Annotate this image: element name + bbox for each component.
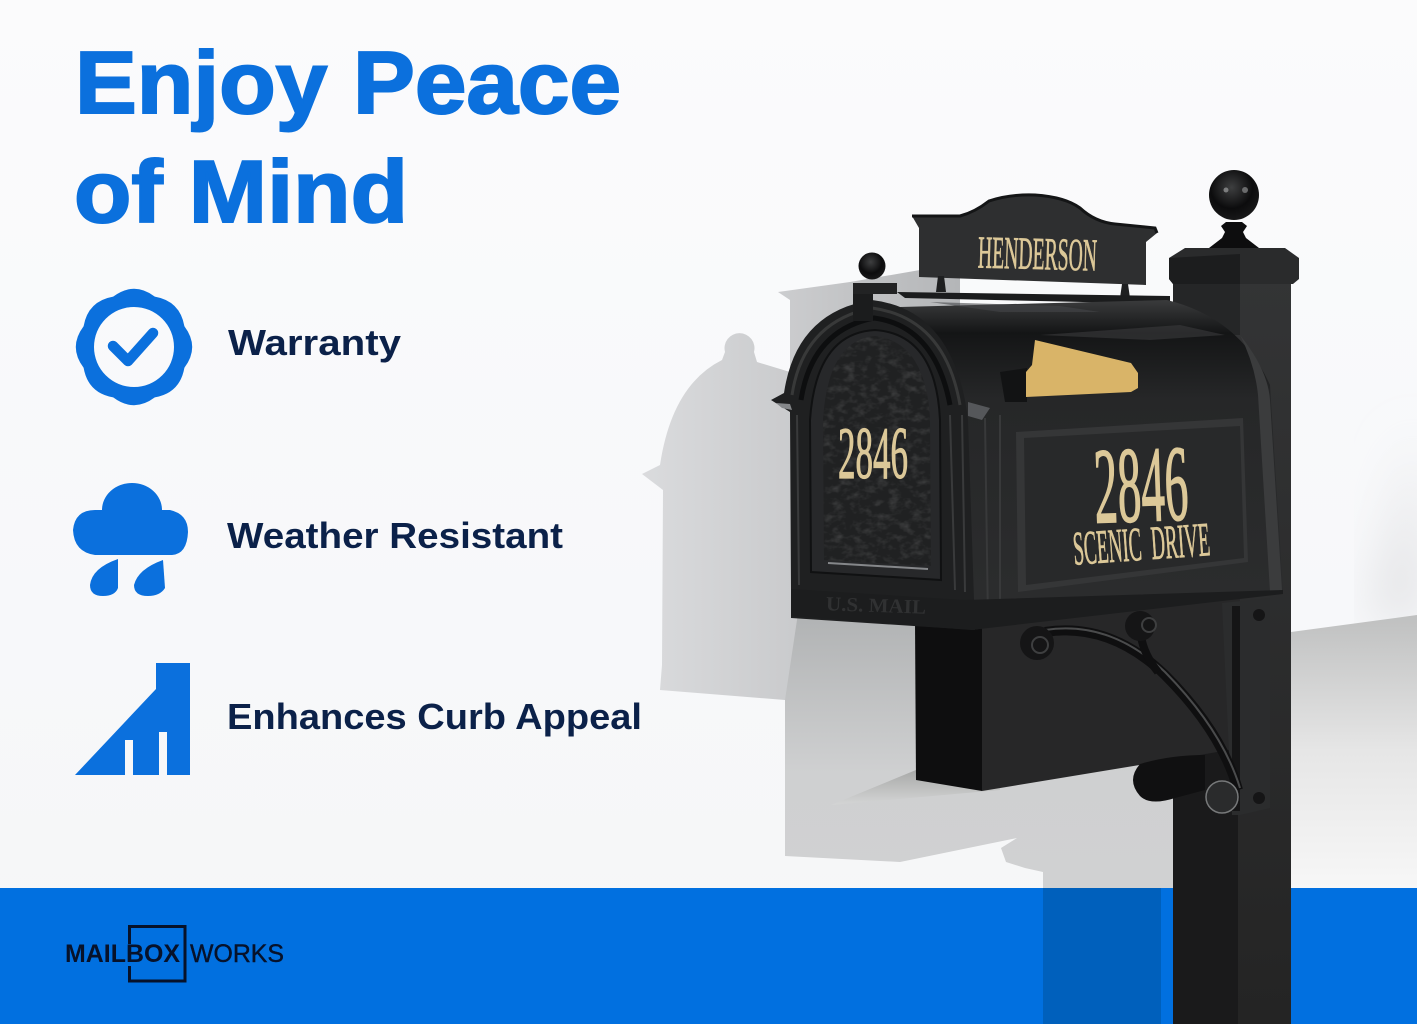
logo (65, 926, 284, 981)
side plaque (1016, 418, 1248, 592)
address plaque: Henderson: HENDERSON (977, 226, 1098, 281)
logo: MAILBOX (65, 940, 180, 968)
mailbox front (771, 252, 990, 630)
post (1169, 170, 1299, 1024)
front finial (853, 252, 897, 321)
label: warranty: Warranty (228, 322, 401, 363)
label: enhances curb appeal: Enhances Curb Appeal (227, 696, 642, 737)
mailbox front: 2846 (838, 413, 908, 495)
post cap (1169, 248, 1299, 284)
base plate: U.S. MAIL (826, 593, 926, 619)
side highlight strips (930, 302, 1282, 622)
icon: rain cloud (73, 483, 188, 596)
rail (897, 292, 1170, 304)
logo: WORKS (190, 940, 284, 968)
right wall shading (1291, 430, 1417, 888)
post finial (1209, 170, 1259, 248)
mounting plate (1222, 598, 1270, 815)
mailbox cast shadow (642, 270, 1173, 888)
scroll bracket (1020, 611, 1240, 813)
knob behind post (1133, 755, 1205, 802)
newspaper box (915, 590, 1240, 791)
mailbox body (900, 300, 1283, 630)
side plaque: 2846 (1092, 424, 1190, 547)
title: of Mind (74, 142, 408, 241)
footer banner (0, 888, 1417, 1024)
base plate (791, 589, 1283, 630)
icon: curb appeal house (75, 663, 190, 775)
flag (1000, 340, 1138, 402)
title (74, 33, 621, 241)
label: weather resistant: Weather Resistant (227, 515, 563, 556)
icon: warranty badge (76, 289, 192, 405)
door (810, 330, 941, 580)
address plaque: Henderson (912, 195, 1157, 298)
title: Enjoy Peace (75, 33, 621, 132)
door texture (823, 336, 931, 569)
ledge highlight (776, 403, 792, 410)
side plaque: SCENIC DRIVE (1071, 513, 1212, 576)
